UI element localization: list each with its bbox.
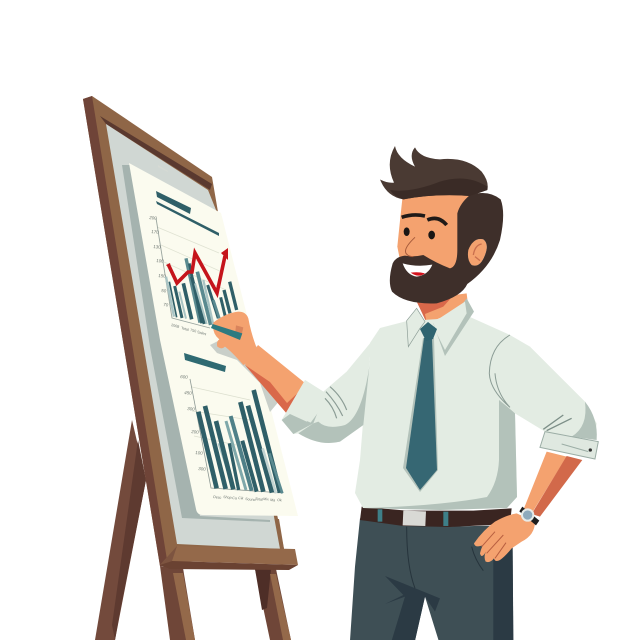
eyebrows (402, 215, 447, 225)
bottom chart axis labels: Sound (245, 497, 256, 502)
necktie (403, 322, 438, 492)
top chart (149, 191, 237, 336)
bottom chart axis labels: Desc (213, 495, 222, 500)
hand on hip with watch (474, 507, 539, 562)
bottom chart axis labels: Mix (263, 497, 269, 502)
paper sheet (129, 163, 298, 516)
bottom chart axis labels: Ok (277, 498, 282, 502)
left sleeve (282, 328, 380, 443)
man (211, 146, 598, 640)
top chart axis labels (149, 215, 207, 336)
nose line (406, 237, 415, 257)
top chart bars (166, 258, 237, 325)
hair side and beard (390, 193, 503, 303)
red trend line with arrow (166, 248, 228, 293)
bottom chart axis labels: Shop (223, 495, 232, 500)
right cuff (540, 432, 598, 459)
hair shading (390, 178, 487, 199)
bottom chart axis labels: 450 (184, 390, 193, 396)
neck (417, 292, 468, 323)
right forearm (523, 452, 582, 517)
shirt torso (355, 317, 517, 510)
bottom chart axis labels: Total (255, 497, 263, 502)
pointing arm (245, 345, 305, 415)
bottom chart axes (190, 379, 283, 493)
top chart axes (156, 218, 210, 328)
bottom chart axis labels: Cik (238, 496, 244, 501)
bottom chart axis labels: 100 (195, 450, 204, 456)
paper clip mark (158, 165, 168, 172)
top chart axis labels: 100 (156, 258, 165, 264)
top chart axis labels: 150 (158, 273, 167, 279)
bottom chart gridlines (192, 387, 250, 445)
hand shadow on paper (210, 330, 280, 412)
top chart gridlines (157, 227, 226, 290)
easel legs (95, 420, 291, 640)
bottom chart axis labels: 300 (198, 466, 207, 472)
top chart axis labels: 750 (190, 328, 197, 334)
bottom chart axis labels: Ma (270, 498, 277, 503)
bottom chart title bar (184, 353, 226, 372)
top chart axis labels: Sales (197, 330, 207, 336)
top chart axis labels: 70 (163, 302, 169, 308)
bottom chart axis labels: 200 (191, 429, 200, 435)
eyes (404, 227, 410, 236)
top chart axis labels: 2008 (171, 323, 180, 329)
belt (360, 507, 512, 527)
top chart axis labels: 170 (151, 229, 160, 235)
right sleeve (489, 335, 597, 440)
bottom chart bars (198, 390, 282, 493)
top chart title bars (156, 191, 219, 236)
collar (407, 298, 474, 356)
paper shadow (122, 165, 270, 522)
top chart axis labels: 50 (161, 288, 167, 294)
pointing hand with marker (211, 312, 260, 365)
easel ledge (160, 546, 298, 570)
top chart axis labels: Total (181, 326, 189, 332)
bottom chart axis labels: 300 (187, 406, 196, 412)
head (380, 146, 503, 303)
easel (83, 96, 298, 640)
ear (467, 239, 487, 266)
hair on top (380, 146, 488, 199)
bottom chart axis labels (180, 374, 282, 503)
bottom chart (180, 353, 283, 503)
board surface (106, 124, 280, 549)
top chart axis labels: 200 (149, 215, 158, 221)
bottom chart axis labels: 600 (180, 374, 189, 380)
top chart axis labels: 130 (153, 244, 162, 250)
shirt torso shadow (363, 400, 517, 510)
face (397, 187, 473, 277)
bottom chart axis labels: Ca (232, 496, 238, 501)
trousers (350, 518, 513, 640)
smile (403, 263, 432, 277)
easel frame (83, 96, 284, 566)
